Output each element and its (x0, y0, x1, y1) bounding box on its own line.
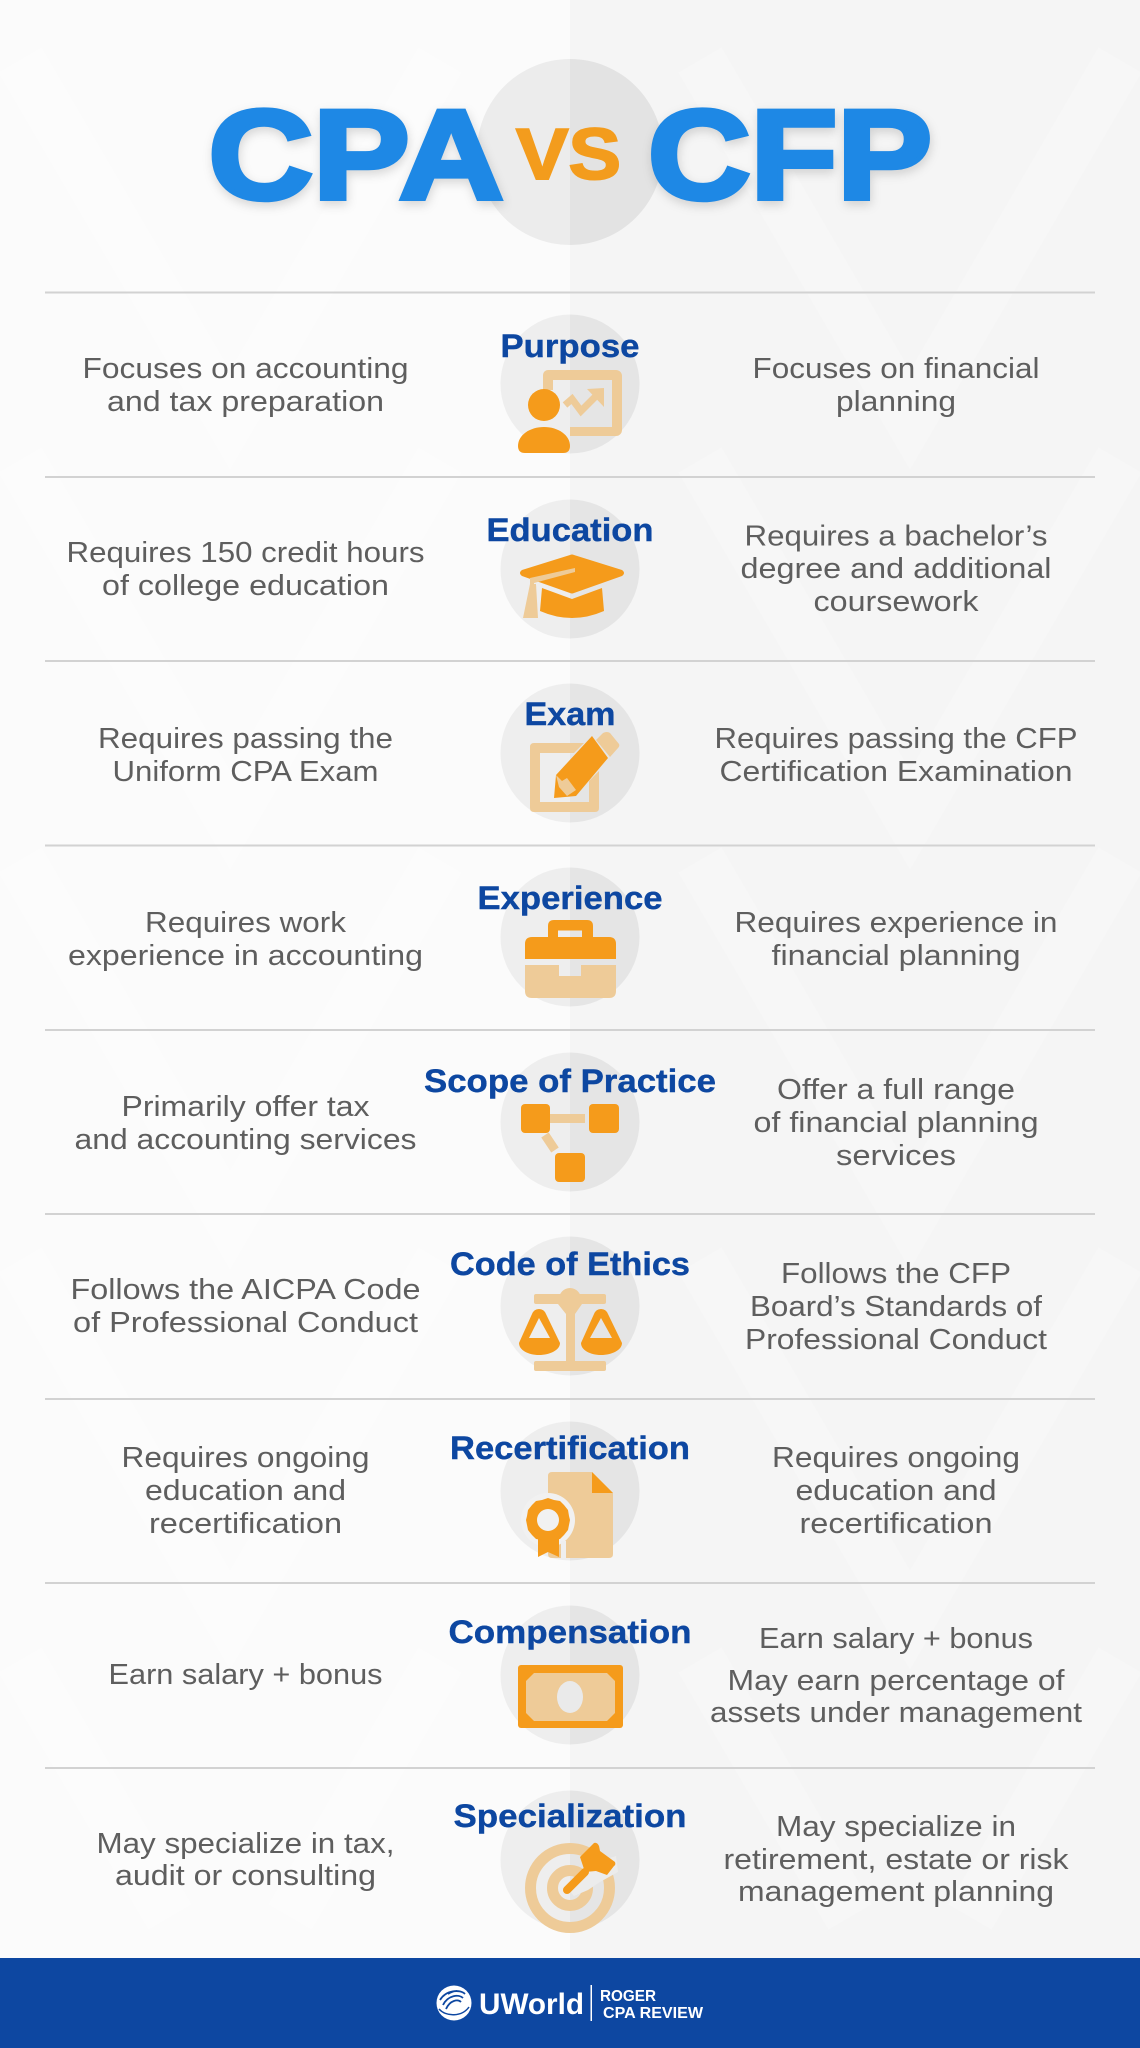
heading: Experience: Experience (478, 880, 662, 916)
icon: target and dart (500, 1790, 640, 1930)
left text: CPA recertification (122, 1442, 370, 1540)
right text: CFP experience: Requires experience in (734, 907, 1058, 939)
right text: CFP ethics: Board’s Standards of (750, 1291, 1043, 1323)
row: Exam (98, 684, 1078, 822)
right text: CFP experience (734, 907, 1058, 972)
title (208, 59, 932, 245)
title badge circle (477, 59, 663, 245)
left text: CPA specialization: May specialize in tax, (96, 1828, 394, 1860)
row: Specialization (96, 1790, 1069, 1930)
left text: CPA exam (98, 723, 393, 788)
left text: CPA ethics: of Professional Conduct (73, 1307, 418, 1339)
right text: CFP specialization: retirement, estate or risk (724, 1844, 1069, 1876)
row: Purpose (82, 314, 1040, 454)
left text: CPA experience: Requires work (145, 907, 347, 939)
heading: Scope of Practice: Scope of Practice (424, 1063, 716, 1099)
right text: CFP recertification (772, 1442, 1020, 1540)
left text: CPA education: Requires 150 credit hours (66, 537, 424, 569)
right text: CFP scope: of financial planning (754, 1107, 1038, 1139)
row: Code of Ethics (70, 1236, 1047, 1376)
row: Experience (68, 868, 1058, 1006)
left text: CPA recertification: education and (145, 1475, 346, 1507)
left text: CPA scope (74, 1091, 416, 1156)
right text: CFP ethics (745, 1258, 1047, 1356)
icon: presenter with chart (500, 314, 640, 454)
icon: graduation cap (500, 500, 640, 638)
right text: CFP compensation: Earn salary + bonus (759, 1623, 1033, 1655)
right text: CFP purpose (752, 353, 1040, 418)
heading: Code of Ethics: Code of Ethics (450, 1246, 690, 1282)
right text: CFP recertification: Requires ongoing (772, 1442, 1020, 1474)
icon: certificate (500, 1422, 640, 1560)
right text: CFP scope: Offer a full range (777, 1074, 1015, 1106)
right text: CFP exam: Requires passing the CFP (714, 723, 1078, 755)
title: CFP: CFP (648, 84, 932, 226)
left text: CPA exam: Uniform CPA Exam (112, 756, 378, 788)
icon: pencil and pad (500, 684, 640, 822)
left text: CPA specialization: audit or consulting (115, 1860, 376, 1892)
icon: connected nodes (500, 1052, 640, 1192)
right text: CFP compensation: assets under management (710, 1697, 1082, 1729)
row: Compensation (108, 1606, 1082, 1744)
row: Scope of Practice (74, 1052, 1038, 1192)
right text: CFP specialization (724, 1811, 1069, 1908)
right text: CFP ethics: Follows the CFP (781, 1258, 1011, 1290)
left text: CPA experience (68, 907, 423, 972)
right text: CFP scope (754, 1074, 1038, 1172)
right text: CFP education: degree and additional (740, 553, 1052, 585)
right text: CFP specialization: management planning (738, 1876, 1054, 1908)
left text: CPA purpose (82, 353, 408, 418)
right text: CFP education: Requires a bachelor’s (744, 520, 1048, 552)
right text: CFP purpose: planning (836, 386, 956, 418)
right text: CFP ethics: Professional Conduct (745, 1324, 1047, 1356)
logo: Roger CPA Review: CPA REVIEW (603, 2005, 703, 2022)
title: CPA: CPA (208, 84, 504, 226)
left text: CPA scope: and accounting services (74, 1124, 416, 1156)
right text: CFP specialization: May specialize in (776, 1811, 1016, 1843)
right text: CFP exam (714, 723, 1078, 788)
right text: CFP exam: Certification Examination (720, 756, 1072, 788)
left text: CPA purpose: Focuses on accounting (82, 353, 408, 385)
left text: CPA specialization (96, 1828, 394, 1892)
heading: Specialization: Specialization (454, 1798, 686, 1834)
heading: Recertification: Recertification (450, 1430, 690, 1466)
right text: CFP compensation: May earn percentage of (728, 1665, 1066, 1697)
row: Recertification (122, 1422, 1020, 1560)
left text: CPA education (66, 537, 424, 602)
left text: CPA ethics: Follows the AICPA Code (70, 1274, 420, 1306)
left text: CPA ethics (70, 1274, 420, 1339)
title: VS: VS (516, 115, 621, 195)
logo: UWorld wordmark: UWorld (479, 1988, 584, 2021)
heading: Purpose: Purpose (500, 328, 640, 364)
right text: CFP recertification: recertification (800, 1508, 992, 1540)
left text: CPA experience: experience in accounting (68, 940, 423, 972)
logo: Roger CPA Review (600, 1988, 703, 2022)
left text: CPA scope: Primarily offer tax (122, 1091, 370, 1123)
logo: Roger CPA Review: ROGER (600, 1988, 656, 2005)
icon: briefcase (500, 868, 640, 1006)
right text: CFP recertification: education and (796, 1475, 996, 1507)
right text: CFP scope: services (836, 1140, 956, 1172)
left text: CPA purpose: and tax preparation (107, 386, 384, 418)
left text: CPA compensation: Earn salary + bonus (108, 1659, 382, 1691)
icon: banknote (500, 1606, 640, 1744)
left text: CPA recertification: Requires ongoing (122, 1442, 370, 1474)
left text: CPA recertification: recertification (149, 1508, 342, 1540)
left text: CPA exam: Requires passing the (98, 723, 393, 755)
left text: CPA education: of college education (102, 570, 389, 602)
heading: Education: Education (486, 512, 654, 548)
right text: CFP education (740, 520, 1052, 618)
heading: Exam: Exam (524, 696, 616, 732)
heading: Compensation: Compensation (448, 1614, 692, 1650)
right text: CFP experience: financial planning (772, 940, 1020, 972)
logo: UWorld globe (436, 1986, 472, 2020)
right text: CFP education: coursework (814, 586, 979, 618)
footer bar (0, 1958, 1140, 2048)
right text: CFP purpose: Focuses on financial (752, 353, 1040, 385)
row: Education (66, 500, 1052, 638)
icon: balance scales (500, 1236, 640, 1376)
right text: CFP compensation (710, 1623, 1082, 1729)
